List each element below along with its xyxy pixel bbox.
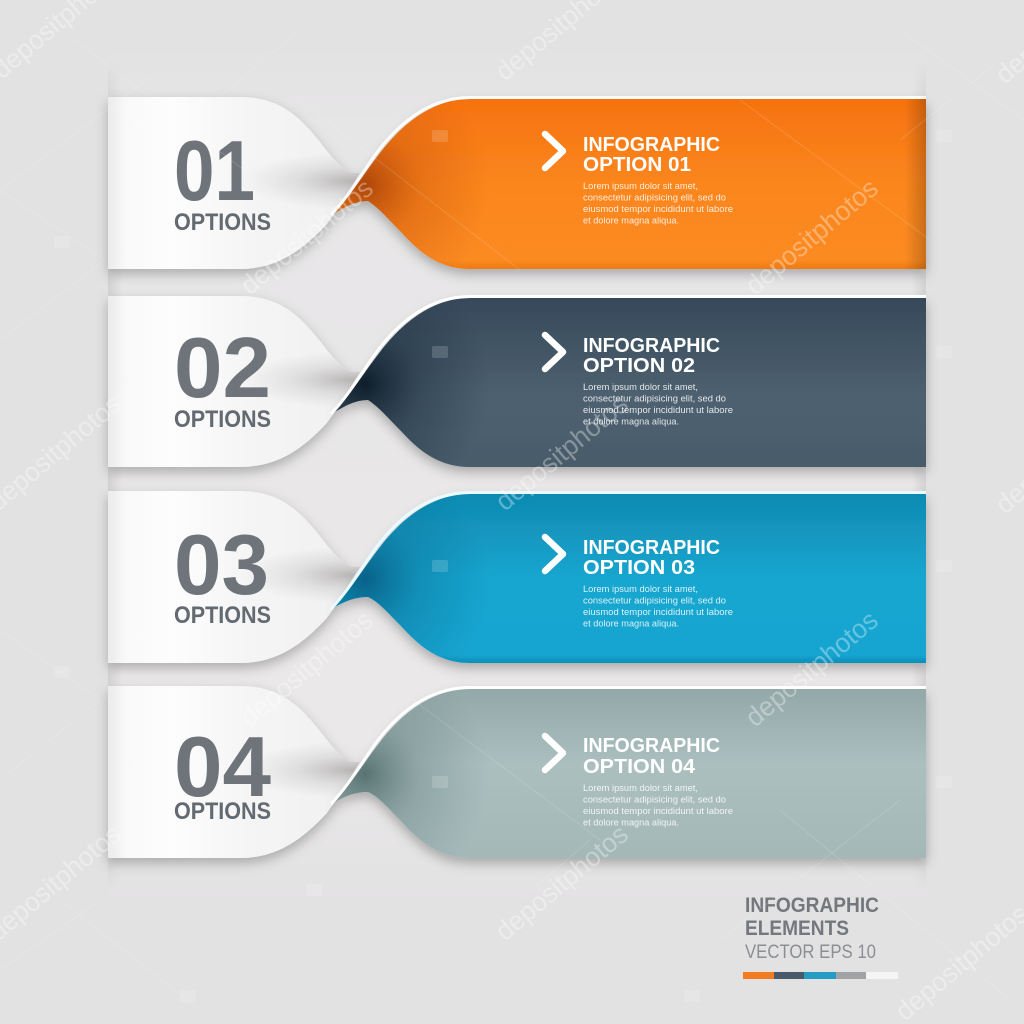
options label: OPTIONS — [174, 406, 271, 433]
body text: Lorem ipsum dolor sit amet, — [583, 181, 698, 192]
ribbon 4: grey green: OPTION 04 — [583, 756, 696, 778]
ribbon 3: blue — [108, 491, 926, 663]
chevron — [545, 134, 563, 168]
body text — [583, 584, 733, 630]
body text: consectetur adipisicing elit, sed do — [583, 794, 726, 806]
ribbon 1: orange: OPTION 01 — [583, 154, 691, 176]
body text: Lorem ipsum dolor sit amet, — [583, 382, 698, 393]
watermark overlay: depositphotos — [740, 173, 884, 301]
body text: eiusmod tempor incididunt ut labore — [583, 806, 733, 817]
heading: INFOGRAPHIC — [583, 537, 720, 559]
watermark overlay: depositphotos — [235, 605, 379, 733]
body text: Lorem ipsum dolor sit amet, — [583, 584, 698, 595]
options label: OPTIONS — [174, 209, 271, 236]
caption: infographic elements: ELEMENTS — [745, 917, 849, 940]
ribbon 4: grey green — [108, 686, 926, 858]
caption: infographic elements — [745, 894, 879, 963]
ribbon 3: blue: OPTION 03 — [583, 557, 695, 579]
watermark overlay: depositphotos — [490, 389, 634, 517]
body text: consectetur adipisicing elit, sed do — [583, 192, 726, 204]
watermark overlay: depositphotos — [490, 819, 634, 947]
body text — [583, 783, 733, 828]
number 04: 04 — [174, 720, 271, 815]
number 03: 03 — [174, 518, 269, 613]
body text: et dolore magna aliqua. — [583, 818, 679, 828]
ribbon 1 shape — [108, 97, 926, 269]
background panel — [108, 45, 926, 905]
caption: infographic elements: INFOGRAPHIC — [745, 894, 879, 917]
body text: eiusmod tempor incididunt ut labore — [583, 405, 733, 416]
ribbon 2 shape — [108, 296, 926, 467]
ribbon 2: dark slate — [108, 296, 926, 467]
chevron — [545, 335, 563, 369]
chevron — [545, 537, 563, 571]
watermark overlay: depositphotos — [235, 173, 379, 301]
options label: OPTIONS — [174, 798, 271, 825]
heading: INFOGRAPHIC — [583, 335, 720, 357]
body text: et dolore magna aliqua. — [583, 618, 679, 630]
watermark overlay: depositphotos — [740, 605, 884, 733]
heading: INFOGRAPHIC — [583, 134, 720, 156]
number 01: 01 — [174, 124, 255, 219]
heading: INFOGRAPHIC — [583, 735, 720, 757]
caption: infographic elements: VECTOR EPS 10 — [745, 942, 876, 963]
ribbon 1: orange — [108, 97, 926, 269]
body text: et dolore magna aliqua. — [583, 416, 679, 428]
ribbon 2: dark slate: OPTION 02 — [583, 355, 695, 377]
body text: Lorem ipsum dolor sit amet, — [583, 783, 698, 794]
body text: consectetur adipisicing elit, sed do — [583, 394, 726, 404]
number 02: 02 — [174, 321, 271, 416]
ribbon 4 shape — [108, 686, 926, 858]
body text — [583, 181, 733, 226]
body text: eiusmod tempor incididunt ut labore — [583, 204, 733, 215]
body text: eiusmod tempor incididunt ut labore — [583, 607, 733, 618]
colour legend bar — [743, 972, 898, 979]
ribbon 3 shape — [108, 491, 926, 663]
chevron — [545, 736, 563, 770]
body text: consectetur adipisicing elit, sed do — [583, 596, 726, 606]
body text: et dolore magna aliqua. — [583, 216, 679, 226]
body text — [583, 382, 733, 428]
options label: OPTIONS — [174, 602, 271, 629]
